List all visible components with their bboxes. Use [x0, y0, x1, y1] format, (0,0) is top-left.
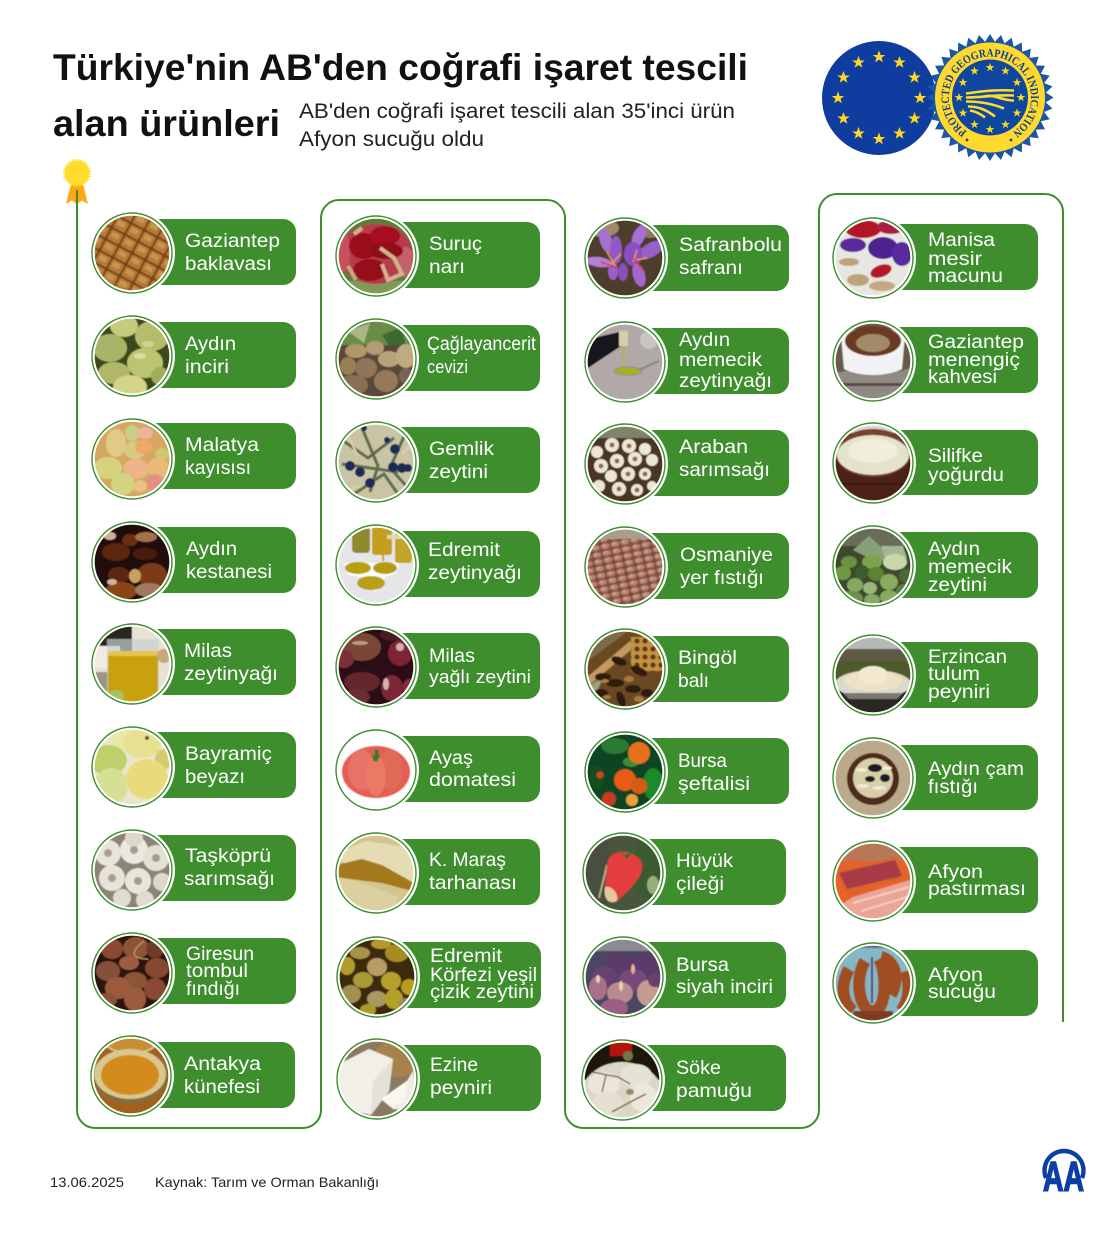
photo: garlic — [89, 827, 175, 913]
label — [679, 436, 770, 481]
item: Aydın kestanesi — [89, 519, 296, 605]
label: çileği — [676, 873, 724, 895]
label — [429, 233, 482, 278]
photo: olive oil glass — [89, 621, 175, 707]
source: Kaynak: Tarım ve Orman Bakanlığı — [155, 1174, 379, 1190]
photo: white cheese — [334, 1036, 421, 1122]
item: Antakya künefesi — [88, 1033, 295, 1119]
label: zeytinyağı — [679, 370, 772, 392]
item: Silifke yoğurdu — [830, 420, 1038, 506]
item: K. Maraş tarhanası — [333, 830, 540, 916]
label: Safranbolu — [679, 234, 782, 256]
photo: figs — [89, 313, 175, 399]
label — [186, 943, 254, 1000]
photo: strawberry — [580, 830, 666, 916]
label: Bayramiç — [185, 743, 272, 765]
photo: oil bottles and dish — [333, 522, 419, 608]
photo: walnuts — [333, 316, 419, 402]
label: Bursa — [676, 954, 729, 976]
item: Edremit Körfezi yeşil çizik zeytini — [334, 934, 541, 1020]
label: zeytinyağı — [184, 663, 278, 685]
label — [427, 333, 537, 377]
label: baklavası — [185, 253, 272, 275]
label: Aydın çam — [928, 758, 1024, 780]
label: Gemlik — [429, 438, 494, 460]
label: tombul — [186, 960, 248, 982]
photo: pine nut dessert — [830, 735, 916, 821]
label: Osmaniye — [680, 544, 773, 566]
label: Silifke — [928, 445, 983, 467]
label: narı — [429, 256, 465, 278]
photo: tulum cheese on plate — [830, 632, 916, 718]
label: şeftalisi — [678, 773, 750, 795]
label: Bingöl — [678, 647, 737, 669]
label: beyazı — [185, 766, 245, 788]
connector frame — [77, 190, 1063, 1128]
label: memecik — [679, 349, 762, 371]
label: memecik — [928, 556, 1012, 578]
photo: baklava — [89, 210, 175, 296]
label: Aydın — [186, 538, 237, 560]
label: domatesi — [429, 769, 516, 791]
label: macunu — [928, 265, 1003, 287]
item: Araban sarımsağı — [582, 421, 789, 507]
label: Hüyük — [676, 850, 733, 872]
item: Gaziantep menengiç kahvesi — [830, 318, 1038, 404]
item: Söke pamuğu — [579, 1037, 786, 1134]
label — [429, 645, 531, 687]
item: Manisa mesir macunu — [830, 215, 1038, 301]
label: yoğurdu — [928, 464, 1004, 486]
label: künefesi — [184, 1076, 260, 1098]
label: Körfezi yeşil — [430, 964, 537, 986]
label: sarımsağı — [679, 459, 770, 481]
photo: tarhana — [333, 830, 419, 916]
label: sucuğu — [928, 981, 996, 1003]
label — [185, 230, 280, 275]
photo: chestnuts — [89, 519, 175, 605]
label: kahvesi — [928, 366, 997, 388]
label — [429, 438, 494, 483]
label: K. Maraş — [429, 849, 506, 871]
label: tarhanası — [429, 872, 517, 894]
photo: hazelnuts — [89, 930, 175, 1016]
label — [185, 434, 259, 479]
item: Çağlayancerit cevizi — [333, 316, 540, 402]
item: Erzincan tulum peyniri — [830, 632, 1038, 718]
photo: olive branch — [333, 419, 419, 505]
title — [53, 47, 748, 144]
label: Araban — [679, 436, 748, 458]
item: Giresun tombul fındığı — [89, 930, 296, 1016]
label — [185, 743, 272, 788]
label — [928, 445, 1004, 486]
label: inciri — [185, 356, 229, 378]
label: zeytini — [429, 461, 488, 483]
photo: honey bees — [582, 626, 668, 712]
label — [428, 539, 522, 584]
subtitle: Afyon sucuğu oldu — [299, 128, 484, 151]
label — [678, 647, 737, 692]
label: Gaziantep — [928, 331, 1024, 353]
label — [680, 544, 773, 589]
item: Gemlik zeytini — [333, 419, 540, 505]
label: Aydın — [185, 333, 236, 355]
label: pamuğu — [676, 1080, 752, 1102]
label — [928, 331, 1024, 388]
photo: saffron flowers — [582, 215, 668, 301]
item: Milas yağlı zeytini — [333, 624, 540, 710]
label — [430, 1054, 492, 1099]
item: Afyon sucuğu — [830, 940, 1038, 1026]
label: yağlı zeytini — [429, 666, 531, 687]
item: Bingöl balı — [582, 626, 789, 712]
photo: apricots — [89, 416, 175, 502]
subtitle — [299, 100, 735, 151]
label — [928, 229, 1003, 287]
item: Suruç narı — [333, 213, 540, 299]
label — [928, 964, 996, 1003]
label: kestanesi — [186, 561, 272, 583]
label: Bursa — [678, 750, 727, 772]
label: Antakya — [184, 1053, 261, 1075]
label: pastırması — [928, 878, 1026, 900]
label — [928, 538, 1012, 596]
item: Bursa siyah inciri — [580, 934, 786, 1020]
label: yer fıstığı — [680, 567, 764, 589]
item: Aydın çam fıstığı — [830, 735, 1038, 821]
label: Edremit — [430, 945, 503, 967]
label — [185, 333, 236, 378]
photo: white peaches — [89, 724, 175, 810]
label: Edremit — [428, 539, 501, 561]
label: Gaziantep — [185, 230, 280, 252]
item: Hüyük çileği — [580, 830, 786, 916]
icon: protected geographical indication seal: PROTECTED GEOGRAPHICAL INDICATION — [941, 48, 1039, 138]
label: Giresun — [186, 943, 254, 965]
label: Afyon — [928, 861, 983, 883]
item: Afyon pastırması — [830, 838, 1038, 924]
label: peyniri — [430, 1077, 492, 1099]
label: fıstığı — [928, 776, 978, 798]
icon: rosette ribbon — [64, 160, 90, 204]
item: Edremit zeytinyağı — [333, 522, 540, 608]
label: Milas — [429, 645, 475, 667]
item: Taşköprü sarımsağı — [89, 827, 296, 913]
label — [676, 1057, 752, 1102]
photo: peanuts — [582, 524, 668, 610]
item: Safranbolu safranı — [582, 215, 789, 301]
label: zeytini — [928, 574, 987, 596]
item: Gaziantep baklavası — [89, 210, 296, 296]
label: Malatya — [185, 434, 259, 456]
item: Aydın inciri — [89, 313, 296, 399]
label — [679, 329, 772, 392]
label: Afyon — [928, 964, 983, 986]
label: zeytinyağı — [428, 562, 522, 584]
label — [184, 845, 275, 890]
label: menengiç — [928, 349, 1020, 371]
label: Suruç — [429, 233, 482, 255]
label: Manisa — [928, 229, 995, 251]
item: Ayaş domatesi — [333, 727, 540, 813]
icon: AA logo: AA — [1043, 1153, 1084, 1200]
photo: dark olives — [333, 624, 419, 710]
photo: oil bottle and spoon — [582, 319, 668, 405]
label — [429, 849, 517, 894]
item: Bursa şeftalisi — [582, 729, 789, 815]
item: Aydın memecik zeytini — [830, 523, 1038, 609]
label — [928, 758, 1024, 798]
photo: green olives — [830, 523, 916, 609]
title: Türkiye'nin AB'den coğrafi işaret tescili — [53, 47, 748, 88]
photo: purple figs — [580, 934, 666, 1020]
label: Ezine — [430, 1054, 478, 1076]
label — [186, 538, 272, 583]
photo: kunefe — [88, 1033, 174, 1119]
label: Taşköprü — [185, 845, 271, 867]
label: Erzincan — [928, 646, 1007, 668]
label: Aydın — [679, 329, 730, 351]
label: safranı — [679, 257, 743, 279]
item: Bayramiç beyazı — [89, 724, 296, 810]
label — [184, 640, 278, 685]
label — [928, 861, 1026, 900]
photo: cotton — [579, 1037, 665, 1134]
photo: sausages — [830, 940, 916, 1026]
label: çizik zeytini — [430, 981, 534, 1003]
label — [678, 750, 750, 795]
label: sarımsağı — [184, 868, 275, 890]
label: Ayaş — [429, 747, 473, 769]
photo: peaches on tree — [582, 729, 668, 815]
label: Söke — [676, 1057, 721, 1079]
item: Aydın memecik zeytinyağı — [582, 319, 789, 405]
label — [184, 1053, 261, 1098]
icon: AA logo — [1043, 1151, 1084, 1200]
item: Osmaniye yer fıstığı — [582, 524, 789, 610]
label — [430, 945, 537, 1003]
icon: EU flag circle — [822, 41, 936, 155]
item: Malatya kayısısı — [89, 416, 296, 502]
photo: tomato — [333, 727, 419, 813]
label — [679, 234, 782, 279]
icon: protected geographical indication seal — [927, 34, 1054, 161]
photo: green cracked olives — [334, 934, 420, 1020]
photo: coffee cup — [830, 318, 916, 404]
label — [429, 747, 516, 791]
label: peyniri — [928, 681, 990, 703]
photo: garlic bunches — [582, 421, 668, 507]
label — [928, 646, 1007, 703]
subtitle: AB'den coğrafi işaret tescili alan 35'inci ürün — [299, 100, 735, 123]
label: tulum — [928, 663, 980, 685]
label — [676, 954, 773, 998]
photo: pomegranate — [333, 213, 419, 299]
photo: mesir candies — [830, 215, 916, 301]
label: Çağlayancerit — [427, 333, 537, 355]
label: fındığı — [186, 978, 240, 1000]
item: Milas zeytinyağı — [89, 621, 296, 707]
label: kayısısı — [185, 457, 251, 479]
title: alan ürünleri — [53, 103, 280, 144]
date: 13.06.2025 — [50, 1174, 124, 1190]
label: mesir — [928, 248, 983, 270]
label: siyah inciri — [676, 976, 773, 998]
item: Ezine peyniri — [334, 1036, 541, 1122]
label: Milas — [184, 640, 232, 662]
photo: yogurt bowl — [830, 420, 916, 506]
label: balı — [678, 670, 709, 692]
label: cevizi — [427, 357, 468, 377]
label: Aydın — [928, 538, 980, 560]
photo: pastirma — [830, 838, 916, 924]
label — [676, 850, 733, 895]
